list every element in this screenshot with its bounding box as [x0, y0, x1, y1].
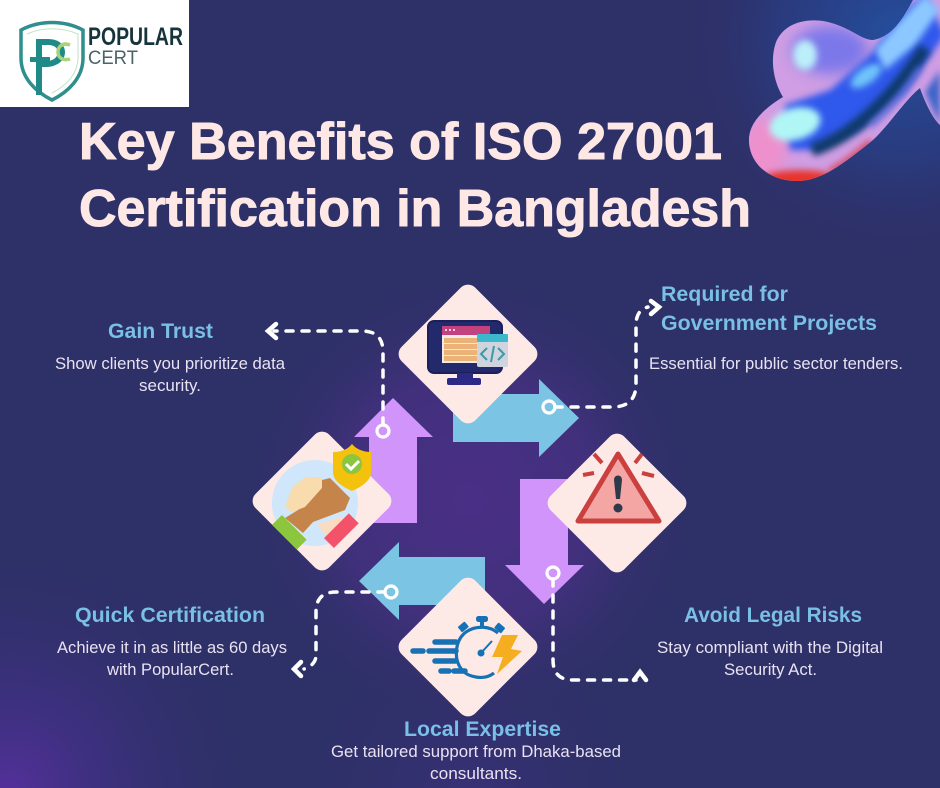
text block: gain trust [55, 320, 286, 395]
cycle arrows [354, 379, 584, 620]
text block: local expertise [331, 718, 621, 783]
title: Certification in Bangladesh [79, 180, 751, 238]
connector: quick certification [294, 586, 397, 676]
text block: legal risks [657, 604, 883, 679]
connector: gain trust [268, 324, 389, 437]
arrow: left blue [359, 542, 485, 620]
panel: handshake diamond [248, 427, 396, 575]
panel: stopwatch diamond [394, 573, 542, 721]
logo wordmark: CERT [88, 48, 138, 69]
panel: code monitor diamond [394, 280, 542, 428]
arrow: down purple [505, 479, 584, 604]
logo wordmark [88, 23, 183, 69]
panel: warning diamond [543, 429, 691, 577]
connector: government projects [543, 301, 659, 413]
title: Key Benefits of ISO 27001 [79, 113, 722, 171]
text block: gain trust: Gain Trust [108, 320, 213, 343]
text block: quick certification: Achieve it in as little as 60 days [57, 639, 287, 657]
text block: legal risks: Avoid Legal Risks [684, 604, 862, 627]
icon: stopwatch with lightning [413, 616, 522, 677]
icon: warning triangle [578, 454, 659, 521]
text block: legal risks: Stay compliant with the Digital [657, 639, 883, 657]
text block: local expertise: Local Expertise [404, 718, 561, 741]
text block: government projects: Government Projects [661, 312, 877, 335]
icon: PC shield [21, 22, 83, 100]
title [79, 113, 751, 238]
connector: legal risks [547, 567, 646, 680]
decorative 3D blob [743, 0, 940, 194]
text block: local expertise: Get tailored support from Dhaka-based [331, 743, 621, 761]
text block: government projects: Required for [661, 283, 788, 306]
text block: quick certification [57, 604, 287, 679]
text block: quick certification: Quick Certification [75, 604, 265, 627]
icon: monitor [428, 321, 508, 385]
text block: government projects: Essential for public sector tenders. [649, 355, 903, 373]
icon: handshake and shield [272, 444, 371, 550]
text block: government projects [649, 283, 903, 373]
text block: local expertise: consultants. [430, 765, 522, 783]
logo wordmark: POPULAR [88, 23, 183, 51]
logo panel [0, 0, 189, 107]
text block: gain trust: security. [139, 377, 201, 395]
text block: legal risks: Security Act. [724, 661, 817, 679]
text block: gain trust: Show clients you prioritize data [55, 355, 286, 373]
text block: quick certification: with PopularCert. [106, 661, 234, 679]
arrow: right blue [453, 379, 579, 457]
arrow: up purple [354, 398, 433, 523]
